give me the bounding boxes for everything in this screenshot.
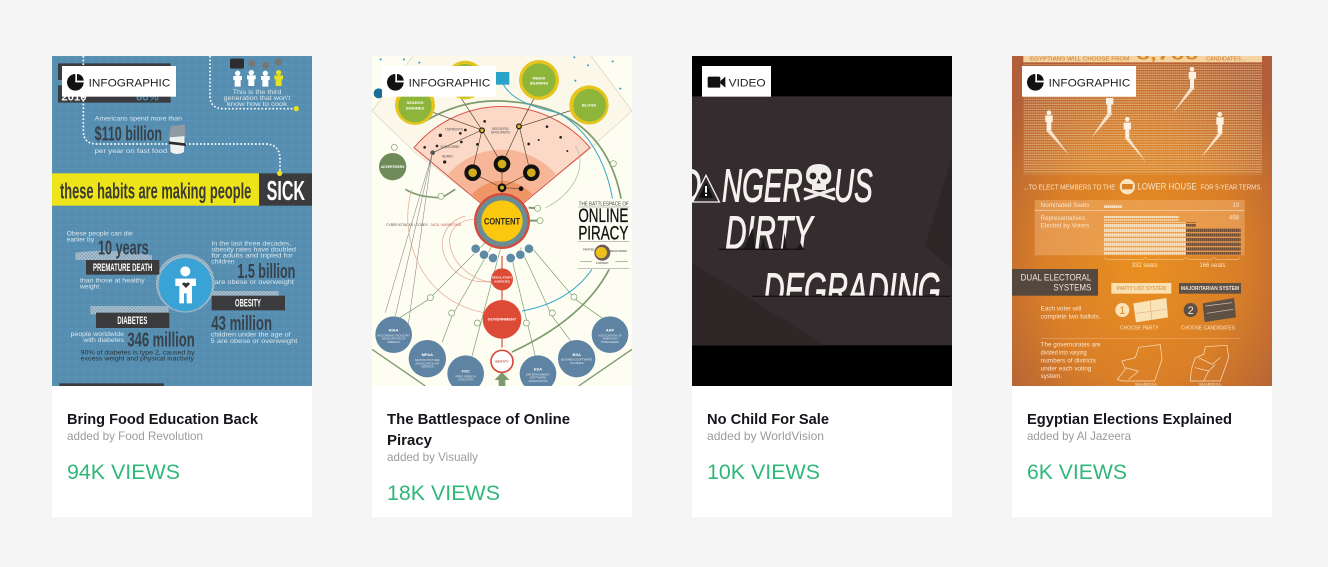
circle: blogs [569,85,609,125]
icon: skull and crossbones [805,164,834,199]
artwork: food habits: children [211,259,235,266]
circle: fsc [447,355,484,392]
fan diagram [372,53,632,221]
panel: seats chart: 498 [1229,216,1240,222]
artwork: food habits: people worldwide [71,331,124,338]
card text: no child for sale: No Child For Sale [707,411,829,428]
heading: lower house [1023,179,1262,194]
circle: government [483,300,521,339]
label: obesity: OBESITY [235,298,261,310]
title block: the battlespace of online piracy: CONTENT [596,261,609,265]
circle: fsc: FSC [462,369,470,374]
text: dirty [719,207,814,259]
badge: video: VIDEO [729,77,766,89]
fan diagram: TORRENTS [445,128,464,132]
artwork: food habits: Americans spend more than [95,116,182,123]
artwork: food habits: weight [79,283,99,290]
artwork: food habits: 66% [136,92,159,104]
circle: riaa: ASSOCIATION OF [382,337,406,341]
badge: infographic [1022,66,1136,97]
icon: party ballot [1115,298,1168,322]
circle: esa: ENTERTAINMENT [526,372,550,376]
artwork: elections: EGYPTIANS WILL CHOOSE FROM [1030,56,1130,62]
circle: identity: IDENTITY [495,360,509,364]
label: premature death: PREMATURE DEATH [93,262,152,274]
card text: egyptian elections: added by Al Jazeera [1027,429,1131,443]
card text: food education [67,411,259,484]
circle: content [474,193,543,249]
artwork: elections: system. [1041,374,1062,380]
card: Egyptian Elections Explained [1012,56,1272,517]
fan diagram: GROUPERS [491,130,511,134]
card text: no child for sale: added by WorldVision [707,429,824,443]
circle: esa: ESA [534,367,542,372]
circle: regulatory agencies: AGENCIES [494,280,510,284]
text: dangerous: US [834,159,873,211]
artwork: food habits: per year on fast food [95,148,168,155]
video thumbnail: dangerous dirty degrading [692,56,952,386]
circle: mpaa: MPAA [422,352,433,357]
card text: online piracy: Piracy [387,432,433,449]
title block: the battlespace of online piracy [578,199,632,269]
circle: aap: PUBLISHERS [601,340,619,344]
heading: dual electoral systems: DUAL ELECTORAL [1021,273,1091,283]
artwork: food habits: know how to cook [227,101,288,108]
panel: seats chart [1035,200,1245,269]
artwork: elections: The governorates are [1041,343,1101,349]
artwork: food habits: 90% of diabetes is type 2, caused by [81,349,195,356]
artwork: food habits: generation that won't [224,95,290,102]
infographic thumbnail: egyptian elections [1012,56,1272,386]
circle: esa: ASSOCIATION [528,379,548,383]
card text: food education: 94K VIEWS [67,461,180,484]
card: The Battlespace of Online Piracy [372,56,632,517]
circle: search engines: ENGINES [406,105,424,110]
maps: governorate outlines [1117,345,1229,381]
circle: esa: SOFTWARE [530,376,546,380]
artwork: food habits: 346 million [127,330,195,352]
artwork: food habits: earlier by [67,236,95,243]
card text: no child for sale [707,411,829,484]
card text: food education: Bring Food Education Back [67,411,259,428]
icon row: media formats [471,244,534,263]
artwork: piracy network [372,53,632,392]
circle: blogs: BLOGS [582,102,596,107]
circle: bsa [558,340,595,377]
artwork: elections: CHOOSE CANDIDATES [1181,326,1236,332]
artwork: piracy network: DATA / MARKETING [431,223,462,227]
artwork: food habits: are obese or overweight [215,279,294,286]
circle: content: CONTENT [484,217,520,227]
fan diagram: SEEDERS/ [492,127,509,131]
artwork: food habits: obesity rates have doubled [211,247,296,254]
badge: infographic: INFOGRAPHIC [89,77,170,89]
circle: mpaa [409,340,446,377]
label: party list system: PARTY LIST SYSTEM [1117,286,1166,292]
heading: lower house: LOWER HOUSE [1137,182,1197,192]
panel: seats chart: 10 [1232,203,1240,209]
fan diagram: SUBSCRIBE [440,145,460,149]
icon: party ballot: 1 [1119,305,1125,317]
connecting arcs [372,76,632,386]
card text: egyptian elections: Egyptian Elections Explained [1027,411,1232,428]
artwork: food habits: than those at healthy [80,278,145,285]
circle: mpaa: AMERICA [421,365,434,369]
voter grid with figures [1023,64,1262,174]
banner: these habits are making people sick [52,171,312,206]
artwork: food habits: 5 are obese or overweight [211,338,297,345]
artwork: elections: numbers of districts [1041,359,1096,365]
circle: mpaa: ASSOCIATION OF [415,361,440,365]
artwork: elections: divided into varying [1041,351,1087,357]
circle: media sharing: SHARING [530,80,548,85]
heading: dual electoral systems: SYSTEMS [1053,283,1091,293]
icon: four figures [230,58,283,87]
infographic thumbnail: food habits [52,56,312,386]
badge: infographic: INFOGRAPHIC [409,77,490,89]
heading: lower house: FOR 5-YEAR TERMS. [1201,185,1262,192]
circle: identity [491,350,513,372]
text: dirty: DIRTY [725,207,814,259]
circle: advertisers [379,153,406,180]
panel: seats chart: 166 seats [1199,263,1225,269]
circle: media sharing [519,60,559,100]
artwork: elections: Each voter will [1041,306,1081,312]
infographic thumbnail: online piracy network [372,56,632,386]
badge: video [702,66,771,97]
circle: advertisers: ADVERTISERS [381,165,405,169]
label: majoritarian system [1179,283,1241,294]
circle: bsa: BUSINESS SOFTWARE [561,358,592,362]
title block: the battlespace of online piracy: RESOURCES [610,249,627,253]
panel: seats chart: Elected by Voters [1041,224,1089,230]
circle: government: GOVERNMENT [488,316,517,321]
badge: infographic [382,66,496,97]
circle: aap: AAP [606,327,615,332]
artwork: food habits: $110 billion [95,124,162,146]
circle: regulatory agencies: REGULATORY [492,276,512,280]
artwork: elections: under each voting [1041,366,1091,372]
artwork: food habits: children under the age of [211,332,291,339]
circle: bsa: BSA [572,352,581,357]
circle: esa [520,355,556,392]
icon: candidate ballot: 2 [1188,305,1194,317]
circle: fsc: FREE SPEECH [456,374,476,378]
card text: egyptian elections: 6K VIEWS [1027,461,1127,484]
icon: candidate ballot [1184,298,1236,322]
artwork: elections: CANDIDATES... [1206,56,1246,62]
card text: food education: added by Food Revolution [67,429,203,443]
circle: aap: AMERICAN [603,337,617,341]
artwork: elections [1012,47,1272,387]
artwork: food habits [52,56,312,386]
artwork: piracy network: CYBER ATTACKS / CODEX [386,223,429,227]
circle: regulatory agencies [491,268,513,290]
circle: mpaa: MOTION PICTURE [415,358,440,362]
artwork: food habits: This is the third [233,89,282,96]
artwork: food habits: with diabetes [82,337,125,344]
icon: fries [169,125,186,154]
heading: lower house: ...TO ELECT MEMBERS TO THE [1023,185,1116,192]
circle: search engines [395,85,435,125]
card: Bring Food Education Back [52,56,312,517]
arrow: up [495,372,509,386]
artwork: food habits: In the last three decades, [211,241,291,248]
circle: media sharing: MEDIA [533,75,546,80]
card text: online piracy [387,411,570,505]
circle: fsc: COALITION [458,378,473,382]
artwork: elections: CHOOSE PARTY [1120,326,1159,332]
card text: no child for sale: 10K VIEWS [707,461,820,484]
artwork: video frame [681,56,952,386]
fan diagram: ADMIN [442,154,453,158]
panel: seats chart: Representatives [1041,216,1085,222]
circle: social [446,61,485,99]
heading: dual electoral systems [1012,269,1098,296]
text: dangerous: NGER [722,159,803,211]
card text: online piracy: The Battlespace of Online [387,411,570,428]
label: obesity [212,296,285,310]
panel: seats chart: Nominated Seats [1041,203,1089,209]
circle: riaa [375,316,412,353]
card text: online piracy: added by Visually [387,450,478,464]
circle: bsa: ALLIANCE [570,361,584,365]
label: diabetes [96,313,169,328]
artwork: food habits: for adults and tripled for [211,253,294,260]
circle: search engines: SEARCH [407,100,424,105]
label: party list system [1111,283,1171,294]
artwork: food habits: 43 million [211,313,272,335]
icon: child with heart [159,258,212,311]
card text: egyptian elections [1027,411,1232,484]
panel: seats chart: 332 seats [1132,263,1158,269]
artwork: food habits: 10 years [98,238,149,260]
label: diabetes: DIABETES [117,315,147,327]
circle: riaa: AMERICA [387,340,400,344]
badge: infographic: INFOGRAPHIC [1049,77,1130,89]
title block: the battlespace of online piracy: PIRATED [583,248,594,252]
card text: online piracy: 18K VIEWS [387,482,500,505]
artwork: food habits: excess weight and physical inactivity [81,355,195,362]
label: majoritarian system: MAJORITARIAN SYSTEM [1181,286,1239,292]
artwork: food habits: 2010 [61,92,87,104]
badge: infographic [62,66,176,97]
circle: aap: ASSOCIATION OF [598,333,622,337]
label: premature death [86,260,159,275]
artwork: elections: complete two ballots. [1041,314,1101,320]
card: No Child For Sale [692,56,952,517]
circle: riaa: RECORDING INDUSTRY [377,333,410,337]
artwork: food habits: Obese people can die [67,230,133,237]
circle: riaa: RIAA [389,327,399,332]
circle: aap [592,316,628,353]
